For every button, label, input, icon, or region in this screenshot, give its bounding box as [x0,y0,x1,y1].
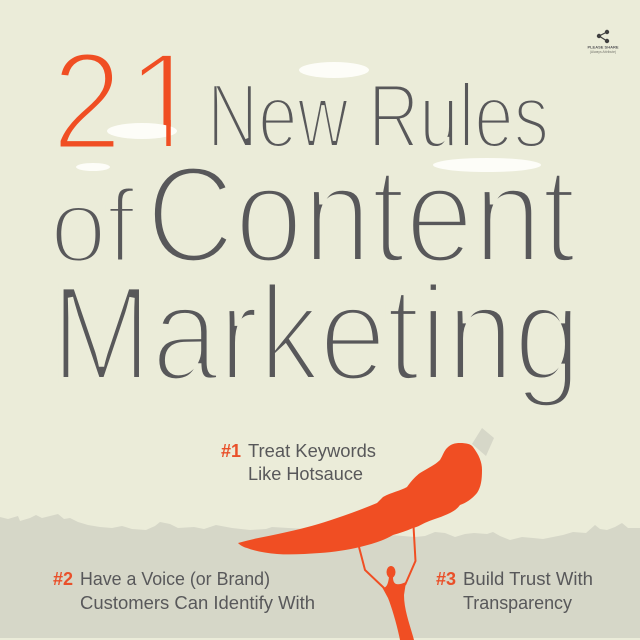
of: of [50,168,136,285]
number 1: 1 [126,24,203,179]
icon: share [587,30,619,54]
cloud small left [76,163,110,171]
Marketing: Marketing [51,257,581,409]
icon: person holding chili [359,526,416,640]
text block: rule 1: #1 [221,441,241,461]
icon: chili stem [472,428,494,456]
cloud behind 21 [107,123,177,139]
text block: rule 3: Build Trust With [463,569,593,589]
text block: rule 3: #3 [436,569,456,589]
text block: rule 1: Like Hotsauce [248,464,363,484]
text block: rule 3: Transparency [463,593,572,613]
icon: chili pepper [238,443,482,554]
ground silhouette [0,514,640,638]
Content: Content [146,138,576,292]
text block: rule 2: Have a Voice (or Brand) [80,569,270,589]
New Rules: New Rules [207,66,549,167]
title [50,24,581,409]
cloud top right [299,62,369,78]
icon: share: (Always Attribute) [590,50,616,54]
text block: rule 2: #2 [53,569,73,589]
text block: rule 3 [436,569,593,613]
number 2: 2 [52,24,122,179]
icon: share: PLEASE SHARE [587,44,619,50]
text block: rule 1 [221,441,376,484]
cloud right [433,158,541,172]
text block: rule 1: Treat Keywords [248,441,376,461]
text block: rule 2: Customers Can Identify With [80,593,315,613]
text block: rule 2 [53,569,315,613]
